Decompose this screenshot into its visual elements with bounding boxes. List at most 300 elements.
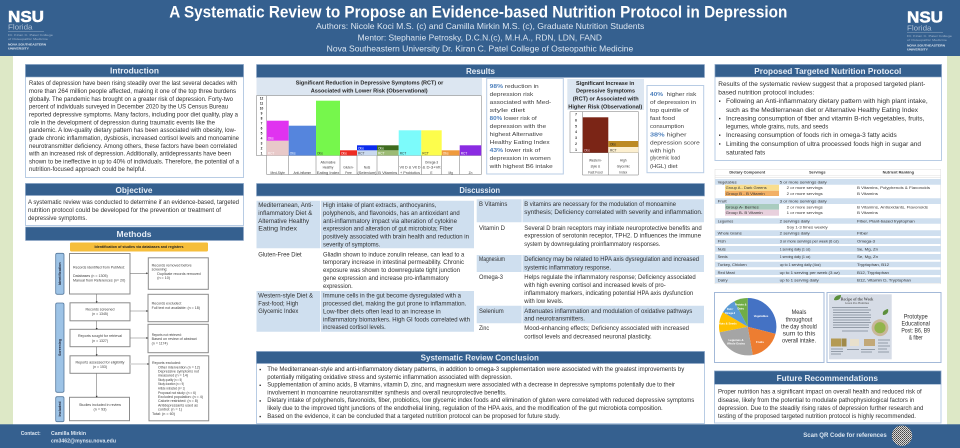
text: protocol body: legumes, whole grains, nuts, and seeds <box>726 124 828 131</box>
box: records identified: Records identified from PubMed: <box>73 266 125 270</box>
row: whole grains: Fiber <box>857 230 869 235</box>
y axis numbers: 3 <box>261 142 263 146</box>
text: introduction body: role in the development of depression during traumatic events like the <box>29 119 215 126</box>
bars: Obs <box>610 142 616 146</box>
panel: methods <box>26 227 244 422</box>
text: protocol body: based nutrition protocol includes: <box>718 90 815 97</box>
heading: conclusion: Systematic Review Conclusion <box>421 352 539 362</box>
logo: NSU left: UNIVERSITY <box>8 46 29 50</box>
flow banner <box>70 242 208 252</box>
box: records screened: Records screened <box>86 308 115 312</box>
text: introduction body: shown to be ineffective in up to 40% of individuals. Therefore, the potential of a <box>29 158 239 165</box>
heading: results: Results <box>466 66 495 76</box>
callout: lower risk statistics: 43% lower risk of <box>490 148 541 154</box>
callout: lower risk statistics: depression risk <box>490 92 533 98</box>
text: introduction body: percent of individuals surveyed in December 2020 by the US Census Bureau <box>29 104 228 111</box>
chart title: Significant Increase in <box>576 81 635 87</box>
text: protocol body: Increasing consumption of fiber and vitamin B-rich vegetables, fruits, <box>726 116 925 123</box>
y axis numbers: 11 <box>260 102 263 106</box>
category labels: E <box>430 171 433 175</box>
row: magnesium: systemic inflammatory response. <box>524 265 611 272</box>
row: magnesium: Magnesium <box>479 256 505 263</box>
header banner <box>0 0 960 56</box>
y axis numbers: 8 <box>261 116 263 120</box>
pie caption <box>781 309 817 345</box>
text: protocol body: Increasing consumption of foods rich in omega-3 fatty acids <box>726 132 897 139</box>
row: western-style diet: processed diet, making the gut prone to inflammation. <box>323 301 467 308</box>
bars: Obs <box>378 146 384 150</box>
heading: introduction: Introduction <box>110 66 159 76</box>
row: B vitamins: B Vitamins <box>479 201 507 208</box>
y axis numbers: 9 <box>261 112 263 116</box>
heading: discussion: Discussion <box>459 185 500 195</box>
box: reports excluded: Study duration (n = 9) <box>158 382 184 386</box>
bars: RCT <box>378 151 385 155</box>
box: reports sought: Reports sought for retrieval <box>78 334 122 338</box>
authors and affiliation: Nova Southeastern University Dr. Kiran C. Patel College of Osteopathic Medicine <box>327 45 634 54</box>
box: reports excluded: Study quality (n = 5) <box>158 378 182 382</box>
row: vegetables: B Vitamins, Polyphenols & Flavonoids <box>857 185 930 190</box>
row: vitamin D <box>479 225 702 248</box>
y axis numbers: 5 <box>261 132 263 136</box>
row: zinc <box>479 325 689 341</box>
logo: NSU left: NOVA SOUTHEASTERN <box>8 42 46 46</box>
text: introduction body: more than 264 million people affected, making it one of the top three burdens <box>29 88 236 95</box>
row: zinc: cortisol levels and decreased neuronal plasticity. <box>524 334 652 341</box>
row: Mediterranean diet: polyphenols, and flavonoids, has an antioxidant and <box>323 210 460 217</box>
row: western-style diet: Low-fiber diets often lead to an increase in <box>323 309 441 316</box>
text: introduction body: reported depressive symptoms. Many factors, including poor diet quality, play a <box>29 112 238 118</box>
text: conclusion bullets: The Mediterranean-style and anti-inflammatory dietary patterns, in addition to omega-3 supplementation were associated with the greatest improvements by <box>267 366 685 373</box>
row: Mediterranean diet: positively associated with brain health and reduction in <box>323 234 469 241</box>
bars: RCT <box>461 151 467 155</box>
y axis numbers: 5 <box>575 124 577 128</box>
stage: screening <box>56 303 64 392</box>
callout: lower risk statistics: depression in women <box>490 156 551 162</box>
table header: Nutrient Ranking <box>883 170 915 175</box>
contact: cm3462@mynsu.nova.edu <box>51 439 117 445</box>
logo: NSU right: of Osteopathic Medicine <box>907 38 947 42</box>
box: records removed: screening: <box>152 268 168 272</box>
callout: higher risk statistics: of depression in <box>650 100 696 106</box>
heading: objective: Objective <box>116 185 153 195</box>
logo: NSU right: NOVA SOUTHEASTERN <box>907 43 945 47</box>
callout: lower risk statistics: associated with Med- <box>490 100 551 106</box>
pie chart: Legumes & <box>728 338 744 342</box>
box: records identified: Databases (n = 1305) <box>73 274 108 278</box>
category labels: & D-3+Vit <box>422 166 441 170</box>
authors and affiliation: Authors: Nicole Koci M.S. (c) and Camilla Mirkin M.S. (c), Graduate Nutrition Students <box>316 22 644 31</box>
text: protocol body: Following an Anti-inflammatory dietary pattern with high plant intake, <box>726 98 928 105</box>
text: introduction body: globally. The pandemic has brought on a greater risk of depression. Forty-two <box>29 96 233 103</box>
text: protocol body <box>718 81 928 157</box>
text: recommendations body: Proper nutrition has a significant impact on overall health and reduced risk of <box>718 389 922 396</box>
row: red meat: Red Meat <box>718 270 736 275</box>
left green strip <box>0 55 13 425</box>
text: conclusion bullets: potentially mitigating oxidative stress and systemic inflammation associated with depression. <box>267 374 513 381</box>
box: records screened <box>70 303 130 321</box>
category labels: Omega-3 <box>425 160 438 164</box>
row: fish <box>718 238 875 243</box>
panel: results <box>256 64 704 175</box>
authors and affiliation: Mentor: Stephanie Petrosky, D.C.N.(c), M.H.A., RDN, LDN, FAND <box>358 33 602 42</box>
pie chart: Protein & <box>735 302 747 306</box>
row: western-style diet: inflammatory biomarkers. High GI foods correlated with <box>323 317 470 324</box>
row fills <box>715 179 941 283</box>
row: omega-3: with low levels. <box>523 298 563 305</box>
bars: RCT <box>422 151 429 155</box>
panel: introduction <box>26 64 244 178</box>
flow diagram: PRISMA <box>56 242 209 422</box>
panel: pie chart of meals <box>714 292 824 362</box>
y axis numbers: 10 <box>260 106 263 110</box>
box: reports assessed: (n = 153) <box>93 365 107 369</box>
row: vegetables <box>718 179 930 196</box>
box: records identified: Manual from References (n= 20) <box>73 278 125 282</box>
category labels: Eating Index <box>317 171 340 175</box>
category labels: style & <box>591 164 601 168</box>
callout: higher risk statistics: 40% higher risk <box>650 92 697 98</box>
row: red meat: up to 1 serving per week (3 oz) <box>780 270 840 275</box>
row: gluten-free diet: gene expression and increase pro-inflammatory <box>323 275 449 282</box>
panel: future recommendations <box>714 371 941 423</box>
row: omega-3: Helps regulate the inflammatory response; Deficiency associated <box>524 274 696 281</box>
logo: NSU right: Dr. Kiran C. Patel College <box>907 34 952 38</box>
authors and affiliation <box>316 22 644 54</box>
box: records removed: (n = 10) <box>157 276 170 280</box>
row: omega-3: with high evening cortisol and increased levels of pro- <box>523 282 666 289</box>
bar chart: reduction in depressive symptoms <box>256 78 482 175</box>
box: reports not retrieved: Reports not retrieved: <box>152 333 182 337</box>
footer banner <box>0 424 960 448</box>
chart title: (RCT) or Associated with <box>573 96 639 102</box>
bars: RCT <box>400 151 406 155</box>
row: vegetables: 2 or more servings <box>787 185 823 190</box>
row: western-style diet: Immune cells in the gut become dysregulated with a <box>323 293 461 300</box>
logo: NSU left: NSU <box>8 9 44 26</box>
y axis numbers: 7 <box>261 122 263 126</box>
text: recommendations body: depression. Due to the steadily rising rates of depression further research and <box>718 405 924 412</box>
row: whole grains: Whole Grains <box>718 230 742 235</box>
row: gluten-free diet: Gliadin shown to induce zonulin release, can lead to a <box>323 252 465 259</box>
category labels: High <box>620 158 627 162</box>
row: dairy: up to 1 serving daily <box>780 277 819 282</box>
row: dairy: Dairy <box>718 277 728 282</box>
category labels: Gluten- <box>343 166 354 170</box>
text: introduction body: nutrition-focused approach could be helpful. <box>29 166 146 173</box>
row: zinc: Mood-enhancing effects; Deficiency associated with increased <box>524 325 689 332</box>
row: nuts: Se, Mg, Zn <box>857 246 878 251</box>
text: recommendations body: testing of the proposed targeted nutrition protocol is highly recommended. <box>718 413 916 420</box>
row: vegetables: Vegetables <box>718 179 737 184</box>
row: fruit <box>718 198 928 215</box>
row: legumes <box>718 218 915 230</box>
text: objective body: A systematic review was conducted to determine if an evidence-based, targeted <box>28 199 239 206</box>
table header: Dietary Component <box>729 170 766 175</box>
row: vegetables: 2 or more servings <box>787 191 823 196</box>
chart title: Associated with Lower Risk (Observational) <box>311 88 428 94</box>
bars: Obs <box>443 151 449 155</box>
y axis numbers: 6 <box>261 126 263 130</box>
row: turkey, chicken <box>718 262 889 267</box>
post caption: Post: B6, B9 <box>901 328 930 335</box>
box: reports excluded: Proposal not study: (n = 6) <box>158 391 196 395</box>
row: Mediterranean diet: Alternative Healthy <box>258 218 310 225</box>
category labels: Anti-inflamm <box>293 171 311 175</box>
row: legumes: Soy 1-3 times weekly <box>787 225 828 230</box>
row: nuts: Nuts <box>718 246 726 251</box>
text: objective body <box>28 199 239 222</box>
y axis numbers: 3 <box>575 136 577 140</box>
box: reports excluded: Depressive symptoms not <box>158 370 199 374</box>
group colour cells <box>725 185 779 191</box>
text: objective body: nutrition protocol could be developed for the prevention or treatment of <box>28 207 221 214</box>
row: whole grains: 2 servings daily <box>780 230 810 235</box>
row: western-style diet: Western-style Diet & <box>258 293 314 300</box>
box: reports excluded: Other intervention (n = 12) <box>158 365 200 369</box>
box: records removed: Duplicate records removed <box>157 272 201 276</box>
heading: future recommendations: Future Recommendations <box>777 373 878 383</box>
callout: lower risk statistics: depression with the <box>490 124 546 130</box>
table header: Servings <box>809 170 826 175</box>
box: reports not retrieved: (n = 1174) <box>152 342 168 346</box>
chart title <box>567 79 644 110</box>
row: fish: 3 or more servings per week (6 oz) <box>780 238 839 243</box>
text: conclusion bullets: Dietary intake of polyphenols, flavonoids, fiber, probiotics, low glycemic index foods and elimination of gluten were correlated with reduced depressive symptoms <box>267 397 694 404</box>
row: red meat: B12, Tryptophan <box>857 270 889 275</box>
row: fish: Omega-3 <box>857 238 875 243</box>
row: turkey, chicken: Tryptophan, B12 <box>857 262 889 267</box>
row: vegetables: Group A - Dark Greens <box>726 185 767 190</box>
box: reports not retrieved <box>148 324 208 353</box>
right green strip <box>947 55 960 425</box>
box: reports assessed: Reports assessed for eligibility <box>76 360 125 364</box>
box: reports sought: (n = 1327) <box>92 339 108 343</box>
row: western-style diet: Fast-food; High <box>258 301 299 308</box>
box: reports excluded: Calorie restricted: (n = 8) <box>158 399 198 403</box>
stage: included: Included <box>58 401 62 416</box>
text: introduction body: grade chronic inflammation, dysbiosis, increased cortisol levels and monoamine <box>29 135 239 142</box>
y axis numbers: 1 <box>261 152 263 156</box>
y axis numbers: 4 <box>261 136 263 140</box>
contact: Camilla Mirkin <box>51 431 87 437</box>
row: fruit: 1 or more servings <box>787 210 823 215</box>
stage: identification: Identification <box>58 262 62 285</box>
row: fruit: 2 or more servings <box>787 204 823 209</box>
bar chart: increase in depressive symptoms <box>567 79 644 175</box>
table: dietary components <box>715 169 941 284</box>
row: Mediterranean diet: anti-inflammatory impact via alteration of cytokine <box>323 218 457 225</box>
category labels: + Probiotics <box>400 171 420 175</box>
row: vitamin D: system by downregulating proinflammatory responses. <box>524 241 660 248</box>
text: conclusion bullets: involvement in monoamine neurotransmitter synthesis and overall neuroprotective benefits. <box>267 390 507 396</box>
text: conclusion bullets <box>260 366 694 420</box>
stage: screening: Screening <box>58 339 62 356</box>
row: selenium: Attenuates inflammation and modulation of oxidative pathways <box>524 308 692 315</box>
y axis numbers <box>575 112 577 152</box>
category labels <box>582 153 638 175</box>
bars: Obs <box>358 146 364 150</box>
flow banner: Identification of studies via databases and registers <box>94 245 184 249</box>
logo: NSU right: UNIVERSITY <box>907 47 928 51</box>
box: studies included: Studies included in review <box>79 403 122 407</box>
category labels: Nuts <box>364 166 371 170</box>
callout: lower risk statistics: 80% lower risk of <box>490 116 537 122</box>
callout: lower risk statistics <box>487 78 563 174</box>
pie caption: Meals <box>792 309 806 316</box>
box: records removed <box>148 258 208 289</box>
contact <box>21 431 117 445</box>
pie chart: Dairy <box>737 306 744 310</box>
bars <box>583 117 638 153</box>
icon: QR code <box>892 426 912 446</box>
bars: Obs <box>290 151 296 155</box>
y axis numbers: 12 <box>260 96 263 100</box>
box: reports excluded: Article retracted (n= 1) <box>158 386 185 390</box>
row: Mediterranean diet: Eating Index <box>258 226 298 232</box>
logo: NSU left: Dr. Kiran C. Patel College <box>8 33 53 37</box>
pie chart: Whole Grains <box>727 342 745 346</box>
box: reports excluded: Antidepressants used as <box>158 404 198 408</box>
bars: Obs <box>584 148 590 152</box>
box: studies included <box>70 397 130 421</box>
row: vegetables: B Vitamins <box>857 191 878 196</box>
bars: RCT <box>610 148 617 152</box>
row: fruit: Group A- Berries <box>726 204 759 209</box>
row: Mediterranean diet: severity of symptoms. <box>323 242 381 249</box>
educational post image <box>829 294 892 359</box>
row: vitamin D: Vitamin D <box>479 225 505 232</box>
box: reports excluded <box>149 356 209 421</box>
row: fruit: B Vitamins <box>857 210 878 215</box>
row: nuts: 1 serving daily (1 oz) <box>780 246 811 251</box>
pie chart: Fish / <box>727 308 733 311</box>
box: records excluded: Records excluded: <box>152 302 182 306</box>
pie caption: sum to this <box>783 331 815 338</box>
text: recommendations body: disease, likely from the potential to modulate pathophysiological factors in <box>718 397 915 404</box>
y axis numbers <box>260 96 263 156</box>
panel: discussion <box>256 184 704 341</box>
category labels: Med-Style <box>271 171 285 175</box>
category labels: Zn <box>469 171 473 175</box>
callout: lower risk statistics: with highest B6 intake <box>489 164 553 170</box>
row: turkey, chicken: up to 1 serving daily (4oz) <box>780 262 821 267</box>
box: records screened: (n = 1345) <box>92 312 108 316</box>
pie chart: Nuts & Seeds <box>719 322 737 326</box>
stage: identification <box>56 253 64 294</box>
stage: included <box>56 397 64 422</box>
text: introduction body: pandemic. A low-quality dietary pattern has been associated with obesity, low- <box>29 127 236 134</box>
y axis numbers: 6 <box>575 118 577 122</box>
bars: RCT <box>268 151 274 155</box>
heading: methods: Methods <box>116 229 152 239</box>
callout: higher risk statistics: glycemic load <box>650 156 680 162</box>
box: records excluded: Full text not available: (n = 18) <box>152 306 200 310</box>
row: fruit: B Vitamins, Antioxidants, Flavonoids <box>857 204 928 209</box>
pie caption: overall intake. <box>782 338 816 345</box>
box: reports assessed <box>70 356 130 373</box>
bars: Obs <box>341 151 347 155</box>
row: omega-3: Omega-3 <box>479 274 503 281</box>
row: legumes: Fiber, Plant-based tryptophan <box>857 218 915 223</box>
callout: higher risk statistics: (HGL) diet <box>650 164 678 170</box>
row: western-style diet <box>258 293 470 331</box>
pie chart: Vegetables <box>754 314 769 318</box>
row: selenium: and neurotransmitters. <box>524 316 585 323</box>
row: vegetables: Group B - B Vitamin <box>726 191 765 196</box>
pie caption: throughout <box>786 316 813 323</box>
callout: higher risk statistics: top quintile of <box>650 108 689 114</box>
pie chart <box>719 298 776 355</box>
y axis numbers: 4 <box>575 130 577 134</box>
heading: protocol: Proposed Targeted Nutrition Protocol <box>754 66 901 76</box>
category labels: Western- <box>589 158 602 162</box>
box: studies included: (n = 93) <box>94 408 106 412</box>
callout: higher risk statistics: fast food <box>650 116 675 122</box>
row: B vitamins: B vitamins are necessary for the modulation of monoamine <box>524 201 676 208</box>
row: seeds <box>718 254 878 259</box>
text: introduction body: Rates of depression have been rising steadily over the last several decades with <box>29 80 237 87</box>
box: reports excluded: control: (n = 1) <box>158 408 182 412</box>
box: records excluded <box>148 294 208 322</box>
callout: lower risk statistics: style diet <box>490 108 526 114</box>
row: seeds: 1 serving daily (1 oz) <box>780 254 811 259</box>
box: reports excluded: Total: (n = 60) <box>152 412 175 416</box>
row: omega-3: inflammatory markers, indicating potential HPA axis dysfunction <box>524 290 694 297</box>
text: objective body: depressive symptoms. <box>28 215 87 222</box>
row: B vitamins: synthesis; Deficiency correlated with severity and inflammation. <box>524 209 703 216</box>
post caption <box>901 313 930 342</box>
chart title: Higher Risk (Observational) <box>568 104 642 110</box>
pie caption: the day should <box>781 323 817 330</box>
bars: RCT <box>358 151 365 155</box>
box: reports not retrieved: Based on review of abstract <box>152 337 197 341</box>
post caption: & fiber <box>909 335 923 342</box>
text: introduction body: neurotransmitter deficiency. Among others, these factors have been correlated <box>29 143 237 150</box>
box: reports excluded: Excluded population: (n = 4) <box>158 395 203 399</box>
row: Mediterranean diet: expression and alteration of gut microbiota; Fiber <box>323 226 454 233</box>
row: magnesium: Deficiency may be related to HPA axis dysregulation and increased <box>524 256 699 263</box>
text: introduction body: with an increased risk of depression. Additionally, antidepressants have been <box>28 151 231 158</box>
category labels: Alternative <box>320 160 336 164</box>
row: turkey, chicken: Turkey, Chicken <box>718 262 747 267</box>
logo: NSU right <box>907 10 952 51</box>
chart title <box>256 78 482 95</box>
logo: NSU right: NSU <box>907 10 943 26</box>
text: recommendations body <box>718 389 924 420</box>
row: whole grains <box>718 230 869 235</box>
callout: lower risk statistics: Healthy Eating Index <box>490 140 550 146</box>
logo: NSU left <box>8 9 53 50</box>
callout: lower risk statistics: 98% reduction in <box>490 84 539 90</box>
row: red meat <box>718 270 889 275</box>
row: vegetables: 5 or more servings daily <box>780 179 827 184</box>
educational post image: Recipe of the Week <box>841 296 874 301</box>
callout: higher risk statistics <box>647 86 704 173</box>
row: seeds: Seeds <box>718 254 728 259</box>
table header <box>715 170 941 178</box>
row: Mediterranean diet <box>258 202 469 249</box>
row: gluten-free diet: temporary increase in intestinal permeability. Chronic <box>323 259 465 266</box>
callout: higher risk statistics: consumption <box>650 124 684 130</box>
logo: NSU left: Florida <box>8 22 33 32</box>
bars <box>267 101 481 156</box>
title: A Systematic Review to Propose an Evidence-based Nutrition Protocol in Depression <box>169 4 787 22</box>
bars: Obs <box>317 151 323 155</box>
row: vitamin D: Several D brain receptors may initiate neuroprotective benefits and <box>524 225 702 232</box>
row: zinc: Zinc <box>479 325 490 332</box>
row: Mediterranean diet: inflammatory Diet & <box>258 210 313 217</box>
